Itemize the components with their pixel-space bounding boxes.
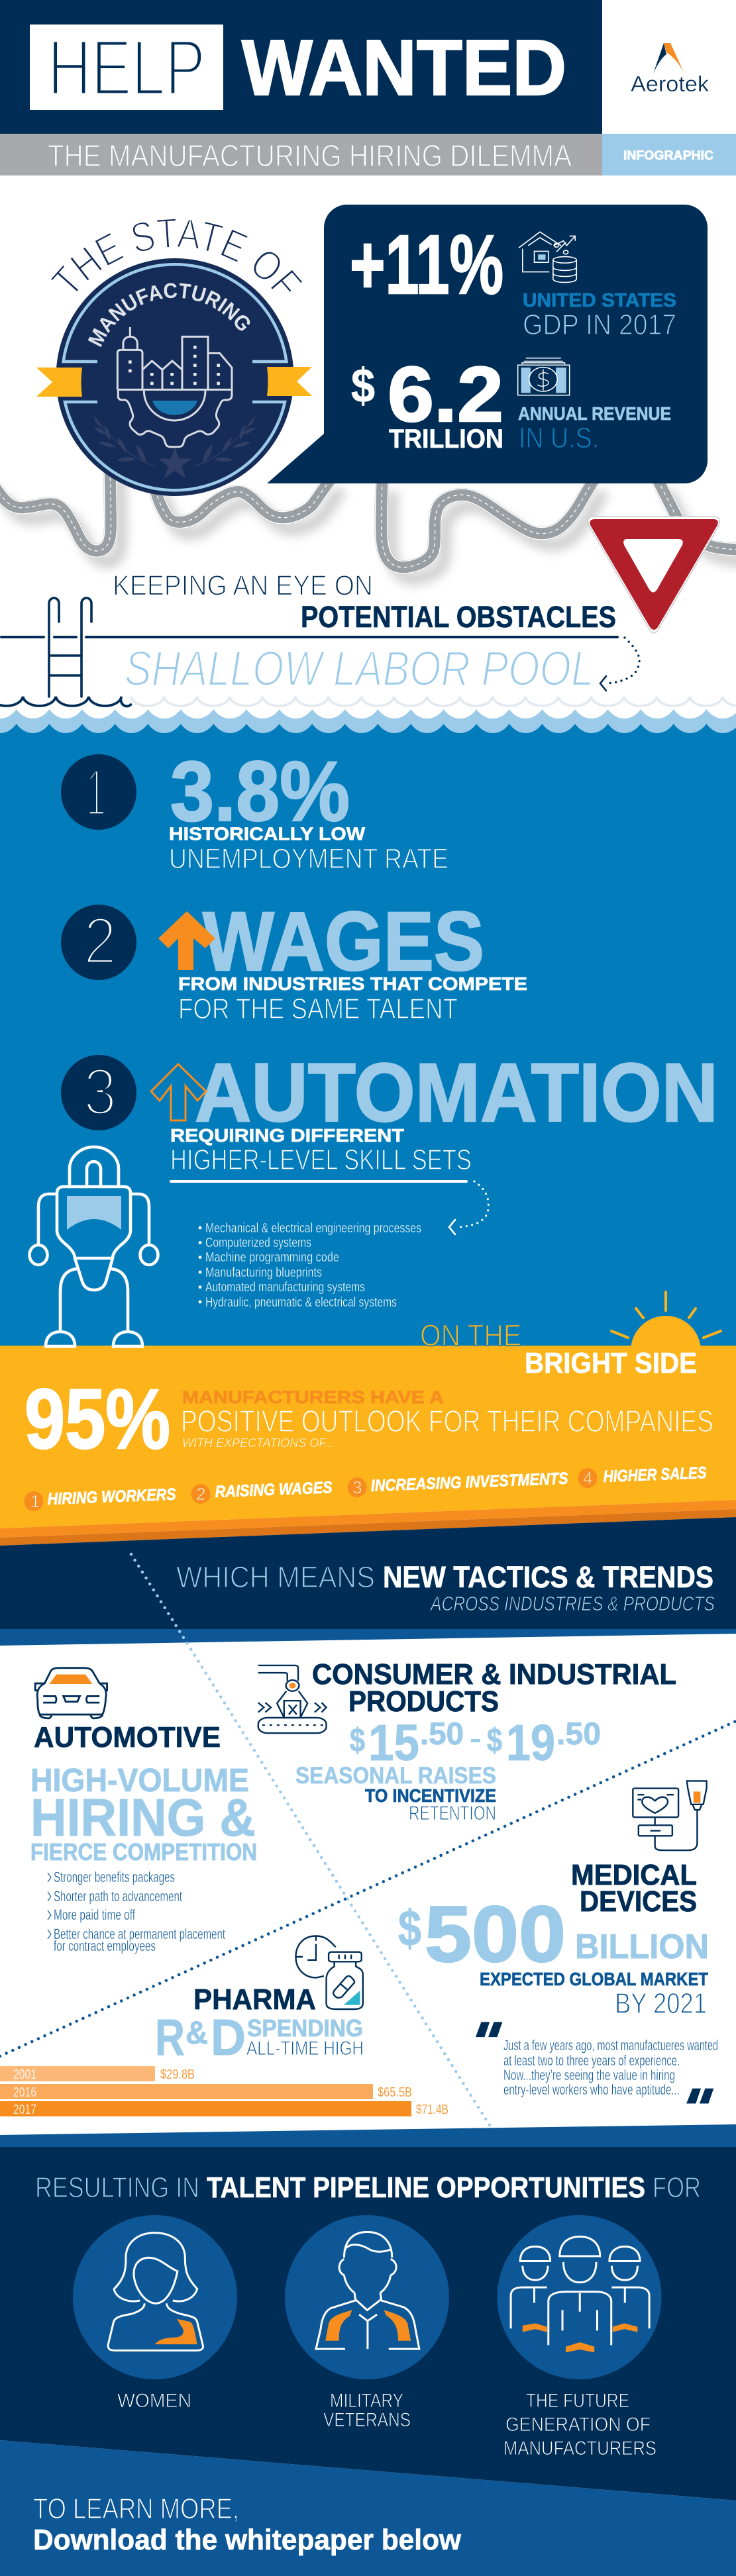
caption [480,1969,708,2020]
obstacle 3: REQUIRING DIFFERENT [170,1125,404,1146]
callout: r&d spending [155,2009,364,2066]
heading: MEDICAL [571,1859,697,1891]
bar: 2017: 2017 [13,2103,36,2117]
skills list [199,1221,421,1310]
obstacle 2: 2 [83,904,117,978]
stat: 95%: 95% [25,1372,170,1467]
stat: $6.2: 6.2 [388,351,503,438]
benefits list [48,1869,225,1954]
subtitle bar: THE MANUFACTURING HIRING DILEMMA [48,138,572,173]
callout: high-volume hiring: HIGH-VOLUME [30,1763,249,1799]
icon: robot [29,1147,158,1347]
infographic tag [602,134,736,175]
group: military veterans: VETERANS [323,2409,411,2431]
expectation 4: 4 [583,1468,592,1488]
expectation 4 [578,1463,707,1488]
wage range: .50 [556,1716,601,1751]
benefits list: More paid time off [54,1907,136,1923]
callout: r&d spending: D [211,2009,246,2066]
label: expectations: WITH EXPECTATIONS OF... [182,1436,335,1450]
obstacle 1 [61,744,448,875]
speech bubble: key stats [267,205,708,483]
wage range: $ [350,1722,365,1759]
curved heading: THE STATE OF [51,219,302,291]
heading: PHARMA [193,1983,316,2016]
industry dividers [0,1554,736,2128]
caption: RETENTION [409,1803,496,1824]
heading [312,1658,676,1718]
label: manufacturers have a: MANUFACTURERS HAVE A [182,1387,444,1407]
obstacle 1: UNEMPLOYMENT RATE [169,843,448,875]
callout: r&d spending: & [185,2016,208,2051]
icon: robot arm on conveyor [258,1665,327,1733]
callout: r&d spending: ALL-TIME HIGH [246,2038,364,2059]
panel: new tactics banner [0,1517,736,1646]
bar: 2016 [0,2084,412,2100]
skills list: Machine programming code [205,1250,339,1265]
wage range: $ [487,1722,502,1759]
obstacle 2: FOR THE SAME TALENT [178,993,458,1025]
stat: $500 billion: $ [398,1901,421,1957]
wage range: 19 [506,1714,555,1771]
winding road [0,464,736,579]
caption: TO INCENTIVIZE [365,1785,496,1806]
shallow labor pool heading: SHALLOW LABOR POOL [125,641,594,696]
caption: BY 2021 [615,1987,707,2020]
expectation 4: HIGHER SALES [603,1463,707,1486]
icon: ultrasound machine [633,1781,707,1850]
callout: high-volume hiring: FIERCE COMPETITION [30,1838,257,1865]
expectation 1 [24,1485,176,1511]
bar: 2016: 2016 [13,2085,36,2100]
heading: RESULTING IN [35,2171,199,2204]
callout: high-volume hiring: HIRING & [30,1788,256,1847]
icon: clock and pill bottle [295,1936,363,2009]
heading: on the: ON THE [420,1318,521,1352]
bar: 2017 [0,2101,448,2117]
Aerotek logo [631,43,710,96]
label: in u.s.: IN U.S. [519,422,599,454]
group: future manufacturers: GENERATION OF [505,2414,651,2436]
Aerotek logo: Aerotek [631,72,710,96]
icon: outline up arrow [151,1064,206,1120]
curved label: MANUFACTURING [87,283,250,347]
caption: SEASONAL RAISES [295,1763,496,1789]
heading: which means: WHICH MEANS [176,1560,375,1594]
obstacle 3: AUTOMATION [195,1047,718,1139]
obstacle 1: 3.8% [170,744,350,839]
group: military veterans [285,2215,449,2431]
skills list: Manufacturing blueprints [205,1265,322,1280]
heading: AUTOMOTIVE [34,1721,221,1754]
skills list: Mechanical & electrical engineering processes [205,1221,421,1236]
expectation 2: 2 [196,1484,205,1504]
callout: r&d spending: R [155,2009,185,2066]
skills list: Computerized systems [205,1236,311,1250]
group: women [73,2215,237,2412]
obstacle 1: HISTORICALLY LOW [169,824,366,844]
bar: 2016: $65.5B [378,2085,412,2100]
title: help: HELP [48,24,205,112]
expectation 2 [191,1478,333,1504]
bar: 2001: $29.8B [160,2067,195,2082]
panel: medical devices [398,1781,718,2104]
quote [476,2022,718,2104]
benefits list: for contract employees [54,1938,156,1954]
heading: potential obstacles: POTENTIAL OBSTACLES [301,600,616,634]
heading: DEVICES [580,1885,697,1918]
icon: solid up arrow [158,911,215,970]
stat: $6.2: $ [351,360,375,413]
stat: $500 billion: BILLION [575,1928,709,1966]
group: women: WOMEN [117,2390,191,2412]
expectation 2: RAISING WAGES [215,1478,333,1501]
heading: PRODUCTS [348,1685,499,1718]
header banner [0,0,602,134]
heading: TALENT PIPELINE OPPORTUNITIES [207,2171,645,2204]
label: united states: UNITED STATES [523,290,676,311]
panel: bright side [0,1318,736,1546]
stat: +11%: +11% [350,218,503,311]
expectation 1: HIRING WORKERS [47,1485,176,1509]
bar: 2001: 2001 [13,2067,36,2082]
icon: cash stack [518,358,570,395]
expectation 3: 3 [352,1477,362,1497]
heading: bright side: BRIGHT SIDE [525,1347,697,1379]
obstacle 2 [61,895,527,1025]
divider and dotted arrow [171,1181,488,1234]
obstacle 2: FROM INDUSTRIES THAT COMPETE [178,973,527,994]
pale surface waves [131,697,736,706]
group: future manufacturers: THE FUTURE [526,2390,629,2412]
icon: car [35,1668,107,1718]
dotted arrow [600,638,639,691]
ribbon left [36,368,82,397]
callout: high-volume hiring [30,1763,257,1865]
panel: automotive [30,1668,257,1954]
group: military veterans: MILITARY [330,2390,403,2412]
badge: the state of manufacturing [36,219,312,496]
benefits list: Better chance at permanent placement [54,1926,225,1942]
expectation 3: INCREASING INVESTMENTS [370,1469,568,1495]
panel: pharma [0,1936,448,2117]
label: annual revenue: ANNUAL REVENUE [518,403,671,424]
stat: $500 billion: 500 [425,1890,566,1979]
bar: 2017: $71.4B [416,2103,448,2117]
heading: FOR [653,2171,701,2204]
skills list: Hydraulic, pneumatic & electrical systems [205,1295,397,1310]
obstacle 3: HIGHER-LEVEL SKILL SETS [170,1144,472,1176]
benefits list: Stronger benefits packages [54,1869,175,1885]
yield sign [588,517,719,633]
panel: labor pool obstacles [0,733,736,1386]
text: download the whitepaper: Download the whitepaper below [33,2524,462,2556]
panel: call to action [0,2440,736,2576]
heading: keeping an eye on: KEEPING AN EYE ON [113,570,373,601]
icon: house with coins [519,232,576,282]
wage range: .50 [420,1716,464,1751]
icon: sun [611,1292,721,1386]
bar chart: r&d spending [0,2066,448,2117]
group: future manufacturers [497,2215,661,2459]
benefits list: Shorter path to advancement [54,1888,182,1905]
infographic tag: INFOGRAPHIC [623,149,713,163]
label: gdp in 2017: GDP IN 2017 [523,309,676,341]
group: future manufacturers: MANUFACTURERS [503,2438,657,2459]
callout: r&d spending: SPENDING [247,2014,363,2042]
panel: consumer and industrial products [258,1658,676,1824]
expectation 1: 1 [30,1491,40,1511]
caption [295,1763,496,1824]
skills list: Automated manufacturing systems [205,1280,365,1295]
heading: CONSUMER & INDUSTRIAL [312,1658,676,1691]
wage range [350,1714,601,1771]
text: to learn more: TO LEARN MORE, [33,2493,239,2525]
obstacle 3: 3 [83,1055,117,1129]
obstacle 2: WAGES [203,895,484,988]
panel: talent pipeline [0,2124,736,2501]
ribbon right [267,367,312,396]
stat: $500 billion [398,1890,709,1979]
pool ladder and deck line [0,598,617,707]
obstacle 3 [61,1047,718,1176]
bar: 2001 [0,2066,195,2082]
icon: city on gear [95,327,254,477]
label: trillion: TRILLION [389,424,503,454]
title: wanted: WANTED [242,24,566,112]
heading [571,1859,697,1918]
obstacle 1: 1 [86,756,106,829]
wage range: 15 [368,1714,419,1771]
water waves [0,709,736,734]
